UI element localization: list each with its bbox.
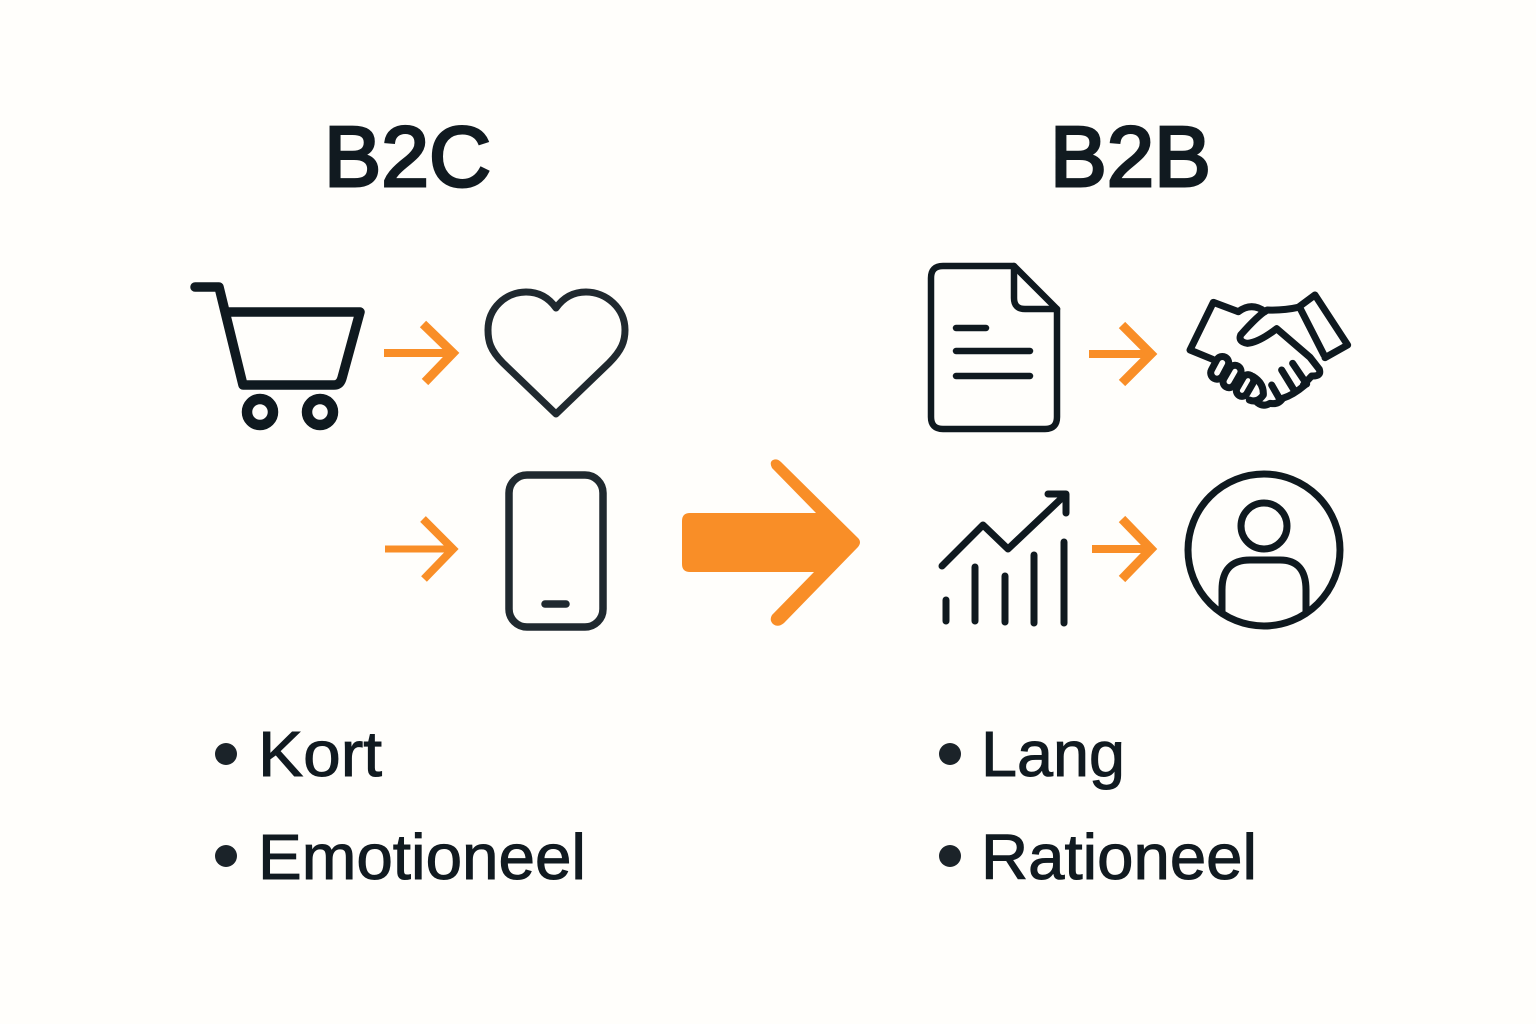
text: Emotioneel: Emotioneel: [258, 821, 586, 893]
icon: person in circle: [1188, 474, 1340, 626]
list: B2B traits: [939, 718, 1257, 893]
text: Lang: Lang: [981, 718, 1125, 790]
text: Rationeel: Rationeel: [981, 821, 1257, 893]
text: Kort: Kort: [258, 718, 382, 790]
icon: handshake: [1190, 295, 1348, 405]
large arrow: B2C to B2B: [682, 459, 860, 626]
arrow: chart to person: [1092, 519, 1152, 579]
icon: growth chart: [942, 494, 1066, 623]
icon: document: [931, 266, 1057, 429]
icon: smartphone: [509, 475, 603, 627]
bullet: Lang: [939, 743, 961, 765]
arrow: cart to heart: [384, 324, 454, 382]
list: B2C traits: [215, 718, 586, 893]
arrow: document to handshake: [1089, 325, 1152, 383]
bullet: Rationeel: [939, 845, 961, 867]
icon: shopping cart: [195, 287, 360, 425]
icon: heart: [488, 292, 625, 414]
bullet: Emotioneel: [215, 845, 237, 867]
heading: B2C: B2C: [324, 110, 491, 205]
heading: B2B: B2B: [1050, 110, 1211, 205]
arrow: to phone: [385, 519, 454, 579]
bullet: Kort: [215, 743, 237, 765]
